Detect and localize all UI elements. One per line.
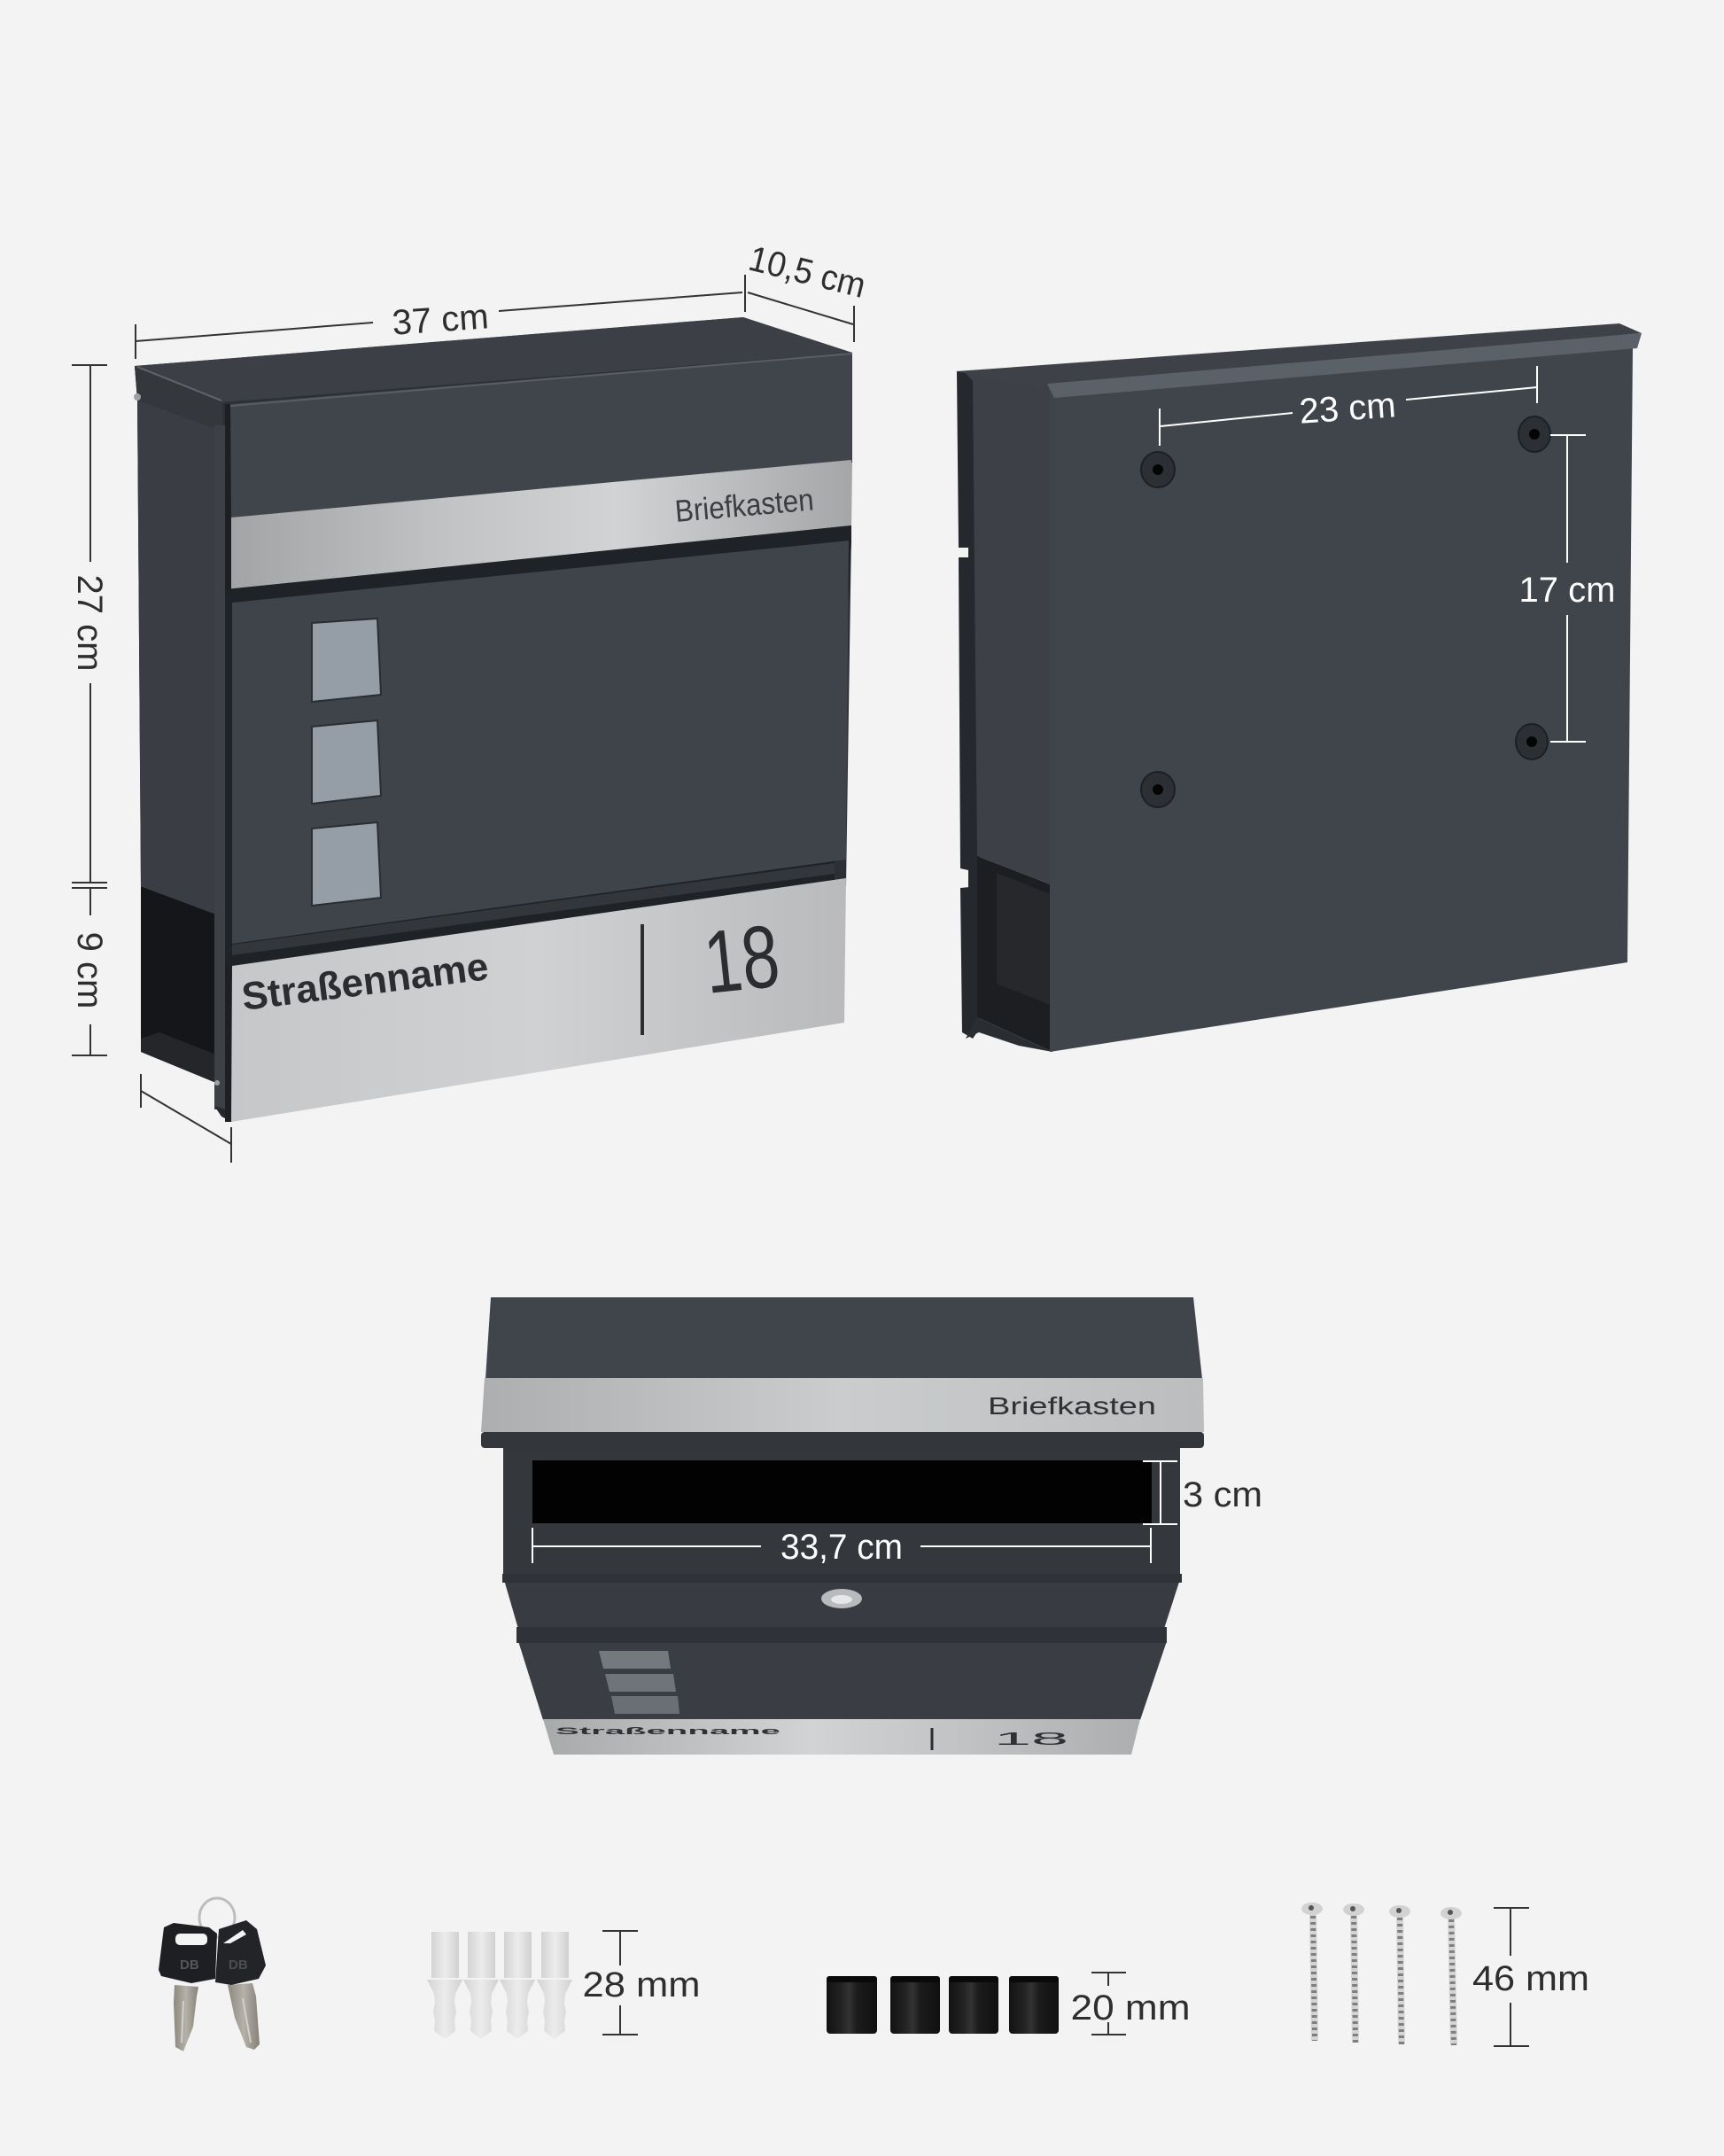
lid front highlight [230, 354, 852, 406]
panel: back view of mailbox [956, 323, 1642, 1052]
dimension 28 mm [583, 1931, 700, 2035]
dimension width 37 cm: 37 cm [391, 297, 490, 343]
door face [518, 1641, 1167, 1720]
lock panel [502, 1574, 1182, 1629]
nameplate divider [641, 924, 644, 1035]
dimension 23 cm [1160, 366, 1537, 446]
lower open compartment [141, 886, 216, 1083]
window 1 [312, 619, 381, 702]
anchor 2 [463, 1932, 499, 2039]
mounting hole 4 [1141, 772, 1175, 807]
dimension height 9 cm: 9 cm [70, 932, 109, 1008]
accessory: screws [1301, 1903, 1589, 2046]
left key groove [182, 2001, 183, 2043]
right key hole [223, 1930, 246, 1943]
house number: 18 [994, 1729, 1068, 1748]
left edge strip middle [959, 557, 980, 888]
compartment foot [966, 1017, 1052, 1052]
left edge strip top [957, 371, 980, 558]
side-front edge strip [214, 425, 225, 1109]
anchor 3 [500, 1932, 535, 2039]
dimension 17 cm: 17 cm [1519, 571, 1615, 610]
sleeve 3 [949, 1976, 998, 2034]
screw 1 [1301, 1903, 1323, 2041]
screw 3 [1389, 1905, 1410, 2044]
right key head [215, 1920, 266, 1985]
mounting hole 3 [1516, 724, 1548, 759]
mail slot [532, 1460, 1152, 1523]
street name: Straßenname [239, 945, 491, 1019]
open compartment [977, 856, 1052, 1052]
window 2 [312, 720, 381, 804]
key labels [180, 1958, 248, 1973]
accessory: spacer sleeves [827, 1973, 1191, 2035]
steel band [231, 460, 851, 589]
dimension 20 mm [1070, 1973, 1191, 2035]
key ring [199, 1898, 235, 1937]
accessory: keys [159, 1898, 266, 2051]
window 1 [599, 1651, 671, 1669]
dimension 33,7 cm: 33,7 cm [780, 1528, 903, 1567]
mailbox side face [135, 366, 225, 918]
anchor 4 [537, 1932, 572, 2039]
dimension depth 10,5 cm: 10,5 cm [745, 239, 869, 306]
anchor 1 [427, 1932, 462, 2039]
key labels: DB [229, 1958, 248, 1973]
lid top face [135, 317, 852, 402]
lid lip [1047, 333, 1642, 398]
dark recess behind door [225, 525, 851, 968]
lid lip [481, 1432, 1204, 1448]
dimension 20 mm: 20 mm [1070, 1989, 1191, 2028]
lock [821, 1589, 862, 1608]
window 3 [611, 1696, 680, 1714]
mounting hole 1 [1141, 452, 1175, 487]
lid top [485, 1297, 1202, 1379]
sleeve 4 [1009, 1976, 1059, 2034]
compartment floor [141, 1032, 216, 1083]
nameplate steel [543, 1719, 1140, 1755]
window 2 [605, 1674, 676, 1692]
left key hole [175, 1934, 207, 1945]
lid side fold [135, 366, 222, 431]
recess lower strip [232, 863, 835, 955]
house number: 18 [700, 907, 784, 1013]
lid side highlight [137, 367, 221, 401]
nameplate steel [231, 878, 846, 1122]
steel band label: Briefkasten [988, 1392, 1156, 1420]
dimensions: front view [70, 239, 869, 1163]
accessory: wall anchors [427, 1931, 700, 2039]
sleeve 2 [890, 1976, 940, 2034]
top cover [956, 323, 1642, 390]
screw 2 [1343, 1903, 1364, 2043]
dimension 28 mm: 28 mm [583, 1965, 700, 2004]
sleeve 1 [827, 1976, 877, 2034]
steel band [481, 1378, 1204, 1432]
mailbox silhouette base [135, 317, 852, 975]
dimension 3 cm [1143, 1461, 1262, 1524]
bottom screw [214, 1080, 220, 1086]
right key groove [243, 1998, 251, 2043]
main door [232, 541, 849, 944]
dimension depth 10,5 cm [745, 239, 869, 342]
left edge strip bottom [960, 886, 980, 1039]
dimension width 37 cm [136, 275, 745, 359]
upper front panel [230, 353, 852, 519]
compartment inner wall [997, 873, 1052, 1006]
panel: top view of mailbox [481, 1297, 1262, 1755]
panel: front view of mailbox [134, 317, 852, 1122]
left key blade [174, 1985, 198, 2051]
window 3 [312, 822, 381, 906]
door lip [516, 1627, 1167, 1643]
left key head [159, 1923, 217, 1983]
screw 4 [1441, 1907, 1462, 2045]
strip foot [214, 1106, 232, 1122]
slot frame [503, 1444, 1180, 1577]
back panel [1050, 346, 1633, 1052]
street name: Straßenname [555, 1725, 780, 1736]
mounting hole 2 [1518, 416, 1550, 452]
side face [964, 371, 1052, 885]
key labels: DB [180, 1958, 199, 1973]
dimension bottom depth [141, 1074, 231, 1163]
dimension 23 cm: 23 cm [1298, 385, 1397, 432]
dimension 46 mm: 46 mm [1472, 1959, 1589, 1998]
lock panel edge [502, 1574, 1182, 1583]
right key blade [228, 1983, 260, 2050]
dimension height 27 cm: 27 cm [70, 575, 109, 671]
top screw [134, 393, 141, 401]
steel band label: Briefkasten [673, 482, 815, 529]
nameplate divider [930, 1728, 934, 1750]
dimension 3 cm: 3 cm [1183, 1475, 1262, 1514]
inner dark edge [225, 404, 232, 1122]
